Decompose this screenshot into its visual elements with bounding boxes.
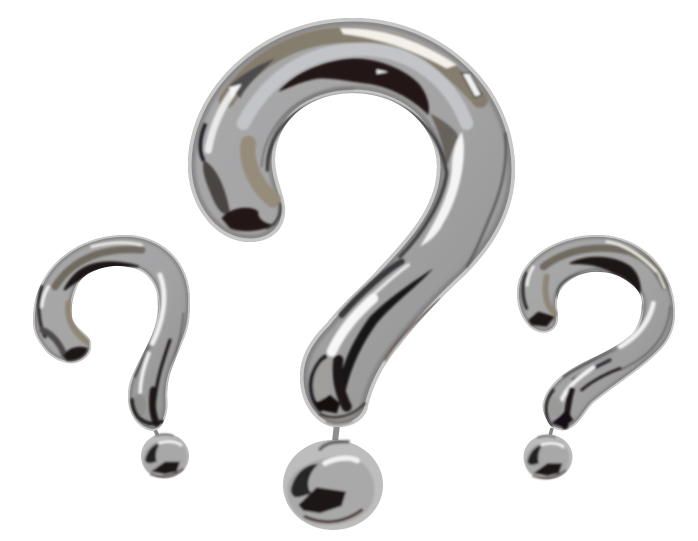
upper reflections [200, 28, 506, 267]
left hook and stem [30, 230, 195, 435]
large connector [335, 424, 337, 442]
right connector [549, 428, 552, 440]
left dot [141, 434, 189, 478]
left connector [154, 428, 160, 440]
question mark: right [512, 230, 680, 480]
question mark: left [30, 230, 195, 478]
large dot [283, 440, 383, 530]
lower reflections [310, 262, 440, 424]
right dot [524, 434, 572, 480]
question mark: center large [185, 12, 520, 530]
large hook and stem [185, 12, 520, 432]
right hook and stem [517, 235, 675, 430]
